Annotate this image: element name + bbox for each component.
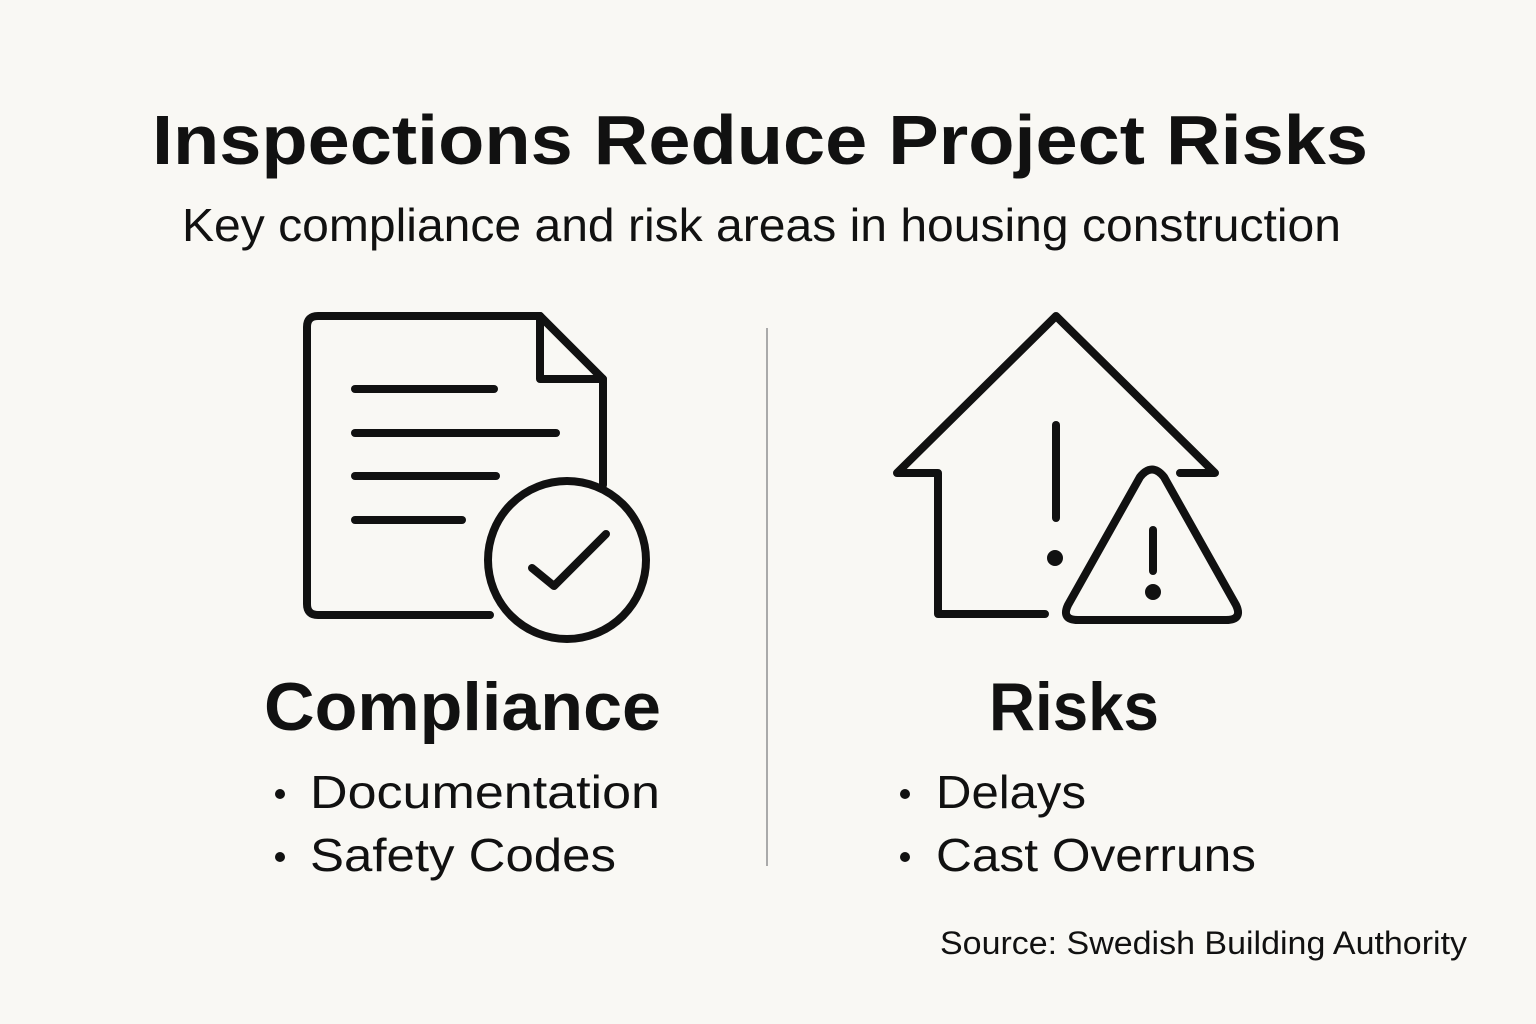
divider — [766, 328, 768, 866]
list: compliance: Documentation — [310, 766, 660, 818]
icon: house with warning — [897, 316, 1238, 620]
subtitle: Key compliance and risk areas in housing construction — [182, 199, 1341, 251]
icon: document with check — [307, 316, 646, 639]
list: risks: Cast Overruns — [936, 829, 1256, 881]
icon: warning triangle — [1066, 470, 1238, 620]
title: Inspections Reduce Project Risks — [152, 101, 1368, 179]
heading: Compliance: Compliance — [264, 669, 661, 745]
list: risks — [900, 766, 1256, 881]
list: risks: Delays — [936, 766, 1086, 818]
list: compliance: Safety Codes — [310, 829, 616, 881]
source note: Source: Swedish Building Authority — [940, 925, 1467, 961]
list: compliance — [275, 766, 660, 881]
icon: check circle — [488, 481, 646, 639]
heading: Risks: Risks — [989, 669, 1159, 745]
